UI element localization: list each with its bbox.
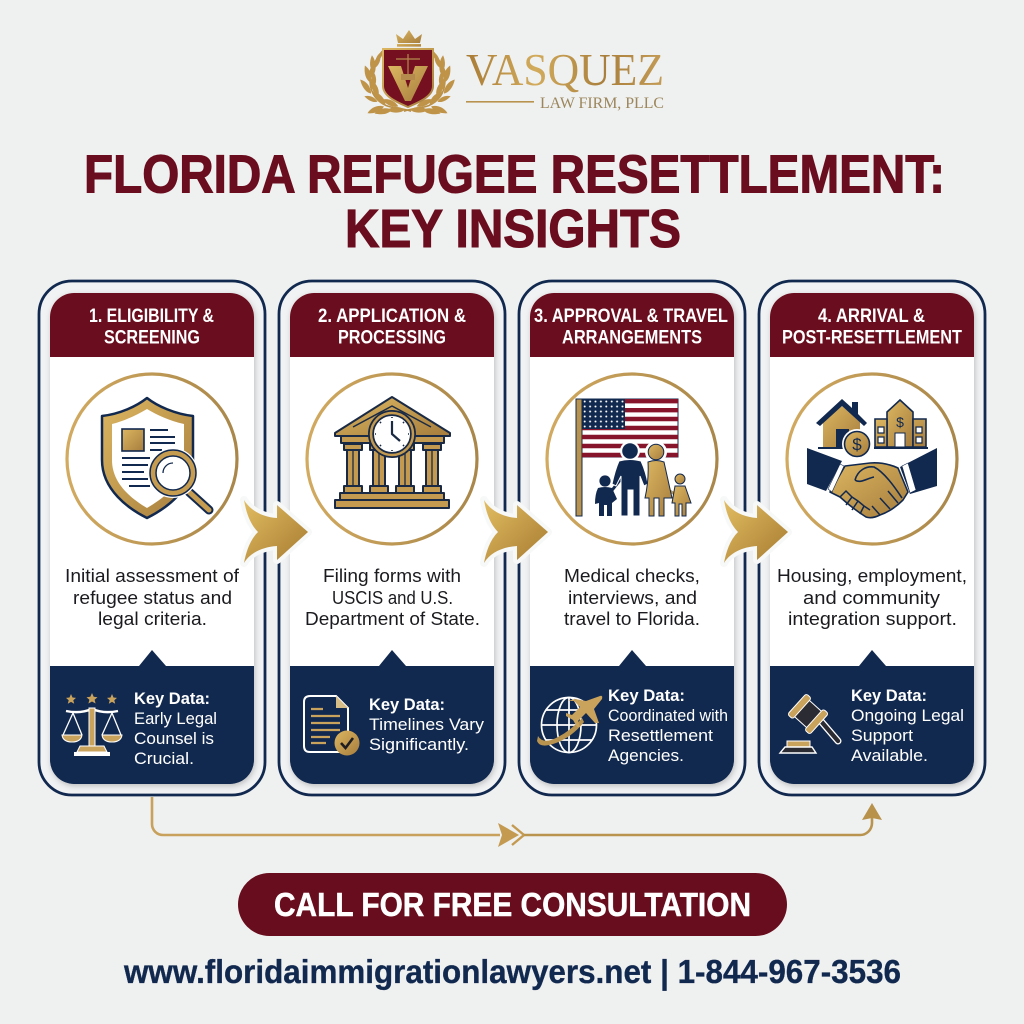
text: step 2 key data: Timelines Vary (369, 715, 485, 734)
text: step 2 key data: Key Data: (369, 695, 445, 714)
icon: government building with clock (335, 397, 450, 508)
icon: handshake (807, 448, 937, 518)
text: step 4 key data: Available. (851, 746, 928, 765)
arrow: step 3 to step 4 (724, 500, 788, 563)
icon: shield with document and magnifier (102, 398, 209, 518)
panel: step 4 arrival and post-resettlement (759, 281, 985, 795)
call to action button (238, 873, 787, 936)
icon: bank building: $ (896, 414, 904, 430)
text: step 1 key data: Counsel is (134, 729, 214, 748)
icon: globe and airplane (537, 696, 602, 752)
panel: step 1 eligibility and screening (39, 281, 265, 795)
text: step 1 key data: Early Legal (134, 709, 217, 728)
text: step 4 key data: Support (851, 726, 913, 745)
text: step 3 description: travel to Florida. (564, 608, 700, 629)
heading: step 4: 4. ARRIVAL & (818, 305, 925, 327)
icon: scales of justice (62, 693, 122, 756)
text: step 1 description: refugee status and (73, 587, 232, 608)
text: step 1 key data: Key Data: (134, 689, 210, 708)
contact line: www.floridaimmigrationlawyers.net | 1-844-967-3536 (123, 953, 901, 990)
panel: step 2 application and processing (279, 281, 505, 795)
icon: crown (396, 30, 422, 47)
logo rule (466, 101, 534, 103)
text: step 4 description: and community (803, 587, 941, 608)
logo: Vasquez Law Firm (359, 30, 664, 115)
heading: step 3: ARRANGEMENTS (562, 326, 702, 348)
text: step 1 description (65, 565, 240, 629)
arrow: step 2 to step 3 (484, 500, 548, 563)
arrow: step 1 to step 2 (244, 500, 308, 563)
text: step 2 description: USCIS and U.S. (332, 587, 453, 608)
text: step 1 description: legal criteria. (98, 608, 207, 629)
text: step 3 description (564, 565, 700, 629)
text: step 4 description (777, 565, 967, 629)
text: step 3 key data: Resettlement (608, 726, 713, 745)
heading: step 1: SCREENING (104, 326, 200, 348)
icon: house (816, 399, 867, 449)
text: step 3 key data: Key Data: (608, 686, 685, 705)
heading: step 1 (89, 305, 214, 348)
heading: step 4 (782, 305, 962, 348)
text: step 3 key data (608, 686, 728, 765)
text: step 2 description: Filing forms with (323, 565, 461, 586)
icon: dollar coin: $ (852, 435, 862, 454)
text: step 3 description: Medical checks, (564, 565, 700, 586)
title (84, 144, 945, 259)
text: step 3 description: interviews, and (568, 587, 697, 608)
text: step 2 description: Department of State. (305, 608, 480, 629)
text: step 1 key data (134, 689, 217, 768)
logo subtitle: LAW FIRM, PLLC (540, 95, 664, 112)
text: step 4 key data (851, 686, 964, 765)
icon: laurel wreath (359, 50, 456, 115)
icon: gavel (780, 694, 838, 753)
icon: document with check mark (304, 696, 360, 756)
text: step 4 key data: Ongoing Legal (851, 706, 964, 725)
text: step 1 description: Initial assessment of (65, 565, 240, 586)
heading: step 2: PROCESSING (338, 326, 446, 348)
heading: step 3 (534, 305, 728, 348)
text: step 2 key data: Significantly. (369, 735, 469, 754)
icon: flag and family (576, 399, 691, 516)
arrow: bottom connector (152, 797, 882, 847)
heading: step 1: 1. ELIGIBILITY & (89, 305, 214, 327)
call to action button: CALL FOR FREE CONSULTATION (274, 886, 751, 923)
text: step 3 key data: Coordinated with (608, 706, 728, 725)
text: step 3 key data: Agencies. (608, 746, 684, 765)
text: step 1 key data: Crucial. (134, 749, 194, 768)
heading: step 2: 2. APPLICATION & (318, 305, 466, 327)
text: step 4 description: Housing, employment, (777, 565, 967, 586)
icon: shield (383, 49, 433, 107)
text: step 4 description: integration support. (788, 608, 957, 629)
icon: house, bank, coin and handshake (807, 399, 937, 518)
text: step 2 key data (369, 695, 485, 754)
icon: American flag (576, 399, 678, 516)
text: step 2 description (305, 565, 480, 629)
heading: step 2 (318, 305, 466, 348)
title: KEY INSIGHTS (345, 199, 681, 259)
heading: step 3: 3. APPROVAL & TRAVEL (534, 305, 728, 327)
icon: family silhouettes (595, 441, 691, 516)
panel: step 3 approval and travel arrangements (519, 281, 745, 795)
text: step 4 key data: Key Data: (851, 686, 927, 705)
logo wordmark: VASQUEZ (466, 45, 664, 95)
heading: step 4: POST-RESETTLEMENT (782, 326, 962, 348)
